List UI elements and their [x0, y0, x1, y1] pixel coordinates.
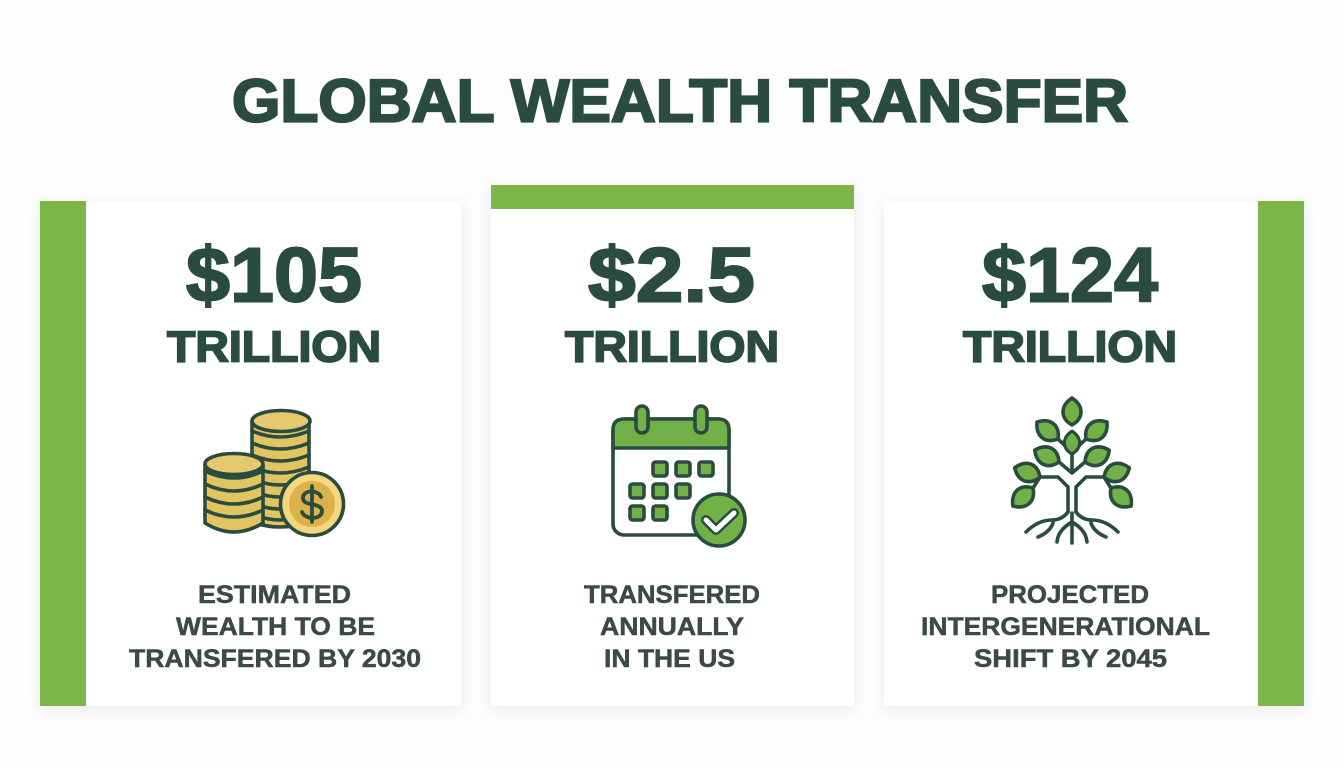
- stat unit: TRILLION: [963, 322, 1177, 372]
- description: ANNUALLY: [600, 613, 744, 641]
- stat value: $105: [186, 232, 362, 318]
- description: TRANSFERED: [584, 581, 760, 609]
- green side bar: [40, 201, 86, 706]
- description: IN THE US: [604, 645, 735, 673]
- card background: [491, 185, 854, 706]
- panel: $2.5 trillion: [491, 185, 854, 706]
- title: GLOBAL WEALTH TRANSFER: [232, 68, 1128, 134]
- stat value: $124: [982, 232, 1158, 318]
- green side bar: [1258, 201, 1304, 706]
- icon: tree with roots: [1007, 398, 1137, 543]
- stat unit: TRILLION: [167, 322, 381, 372]
- card background: [884, 201, 1304, 706]
- stat value: $2.5: [588, 232, 755, 318]
- description: WEALTH TO BE: [176, 613, 375, 641]
- description: [921, 581, 1210, 673]
- description: SHIFT BY 2045: [974, 645, 1167, 673]
- panel: $124 trillion: [884, 201, 1304, 706]
- card background: [40, 201, 461, 706]
- description: PROJECTED: [991, 581, 1149, 609]
- description: TRANSFERED BY 2030: [129, 645, 421, 673]
- icon: calendar with check: [613, 406, 745, 546]
- description: ESTIMATED: [198, 581, 351, 609]
- description: [584, 581, 760, 673]
- description: INTERGENERATIONAL: [921, 613, 1210, 641]
- green top bar: [491, 185, 854, 209]
- icon: coin stacks: [205, 410, 344, 536]
- stat unit: TRILLION: [565, 322, 779, 372]
- description: [129, 581, 421, 673]
- panel: $105 trillion: [40, 201, 461, 706]
